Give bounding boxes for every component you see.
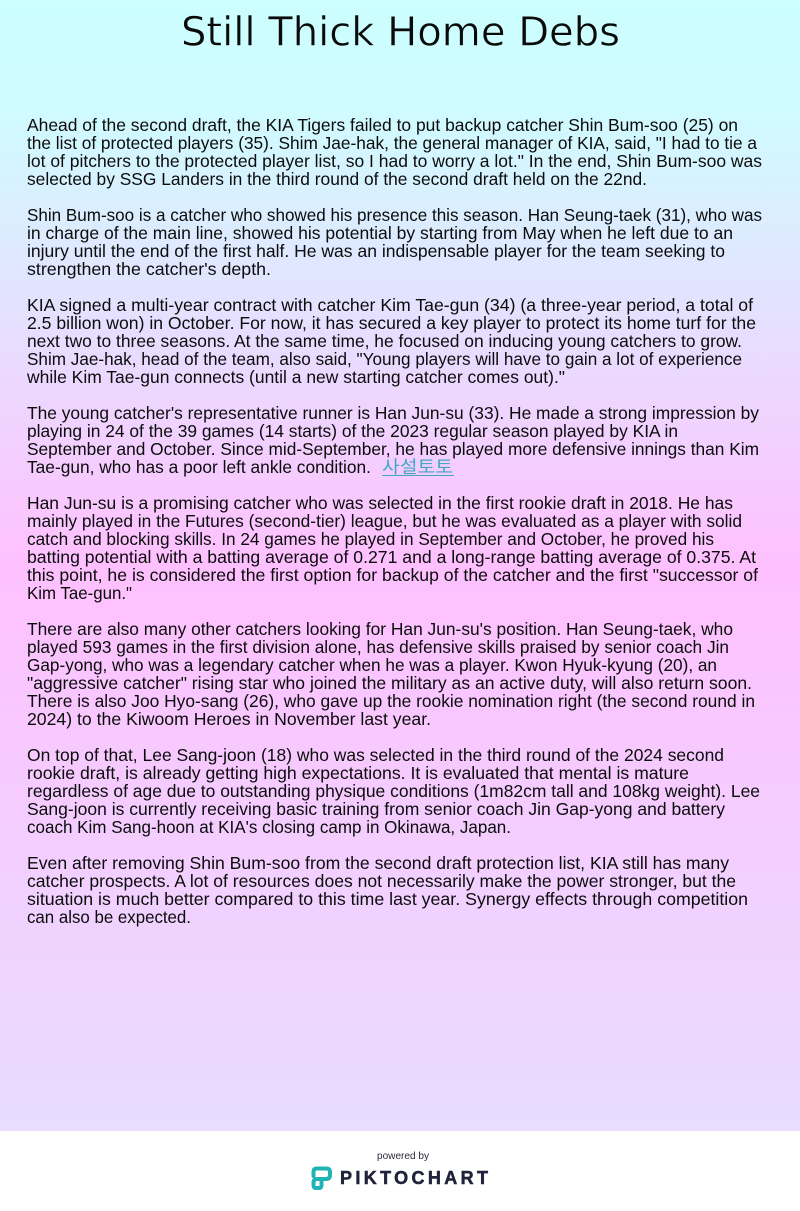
paragraph 6: "aggressive catcher" rising star who joined the military as an active duty, will also return soon. xyxy=(27,673,752,693)
paragraph 7: regardless of age due to outstanding physique conditions (1m82cm tall and 108kg weight). Lee xyxy=(27,781,760,801)
paragraph 4: Tae-gun, who has a poor left ankle condition. xyxy=(27,457,371,477)
paragraph 1: Ahead of the second draft, the KIA Tigers failed to put backup catcher Shin Bum-soo (25) on xyxy=(27,115,738,135)
paragraph 5: mainly played in the Futures (second-tier) league, but he was evaluated as a player with solid xyxy=(27,511,742,531)
paragraph 7 xyxy=(27,745,760,837)
paragraph 3: KIA signed a multi-year contract with catcher Kim Tae-gun (34) (a three-year period, a total of xyxy=(27,295,753,315)
paragraph 4: The young catcher's representative runner is Han Jun-su (33). He made a strong impression by xyxy=(27,403,759,423)
paragraph 6: 2024) to the Kiwoom Heroes in November last year. xyxy=(27,709,431,729)
paragraph 5: batting potential with a batting average of 0.271 and a long-range batting average of 0.375. At xyxy=(27,547,756,567)
paragraph 5: Han Jun-su is a promising catcher who was selected in the first rookie draft in 2018. He has xyxy=(27,493,733,513)
paragraph 2: Shin Bum-soo is a catcher who showed his presence this season. Han Seung-taek (31), who was xyxy=(27,205,762,225)
footer xyxy=(0,1131,800,1211)
paragraph 2: in charge of the main line, showed his potential by starting from May when he left due to an xyxy=(27,223,733,243)
paragraph 8: can also be expected. xyxy=(27,907,191,927)
paragraph 3 xyxy=(26,295,756,387)
paragraph 1 xyxy=(27,115,762,189)
paragraph 7: On top of that, Lee Sang-joon (18) who was selected in the third round of the 2024 second xyxy=(27,745,724,765)
link text: 사설토토 xyxy=(382,457,453,477)
paragraph 5: catch and blocking skills. In 24 games he played in September and October, he proved his xyxy=(27,529,714,549)
paragraph 8: catcher prospects. A lot of resources does not necessarily make the power stronger, but the xyxy=(27,871,736,891)
paragraph 8: situation is much better compared to this time last year. Synergy effects through competition xyxy=(27,889,748,909)
paragraph 6: There is also Joo Hyo-sang (26), who gave up the rookie nomination right (the second round in xyxy=(27,691,755,711)
paragraph 3: while Kim Tae-gun connects (until a new starting catcher comes out)." xyxy=(26,367,565,387)
paragraph 1: lot of pitchers to the protected player list, so I had to worry a lot." In the end, Shin Bum-soo was xyxy=(27,151,762,171)
paragraph 7: Sang-joon is currently receiving basic training from senior coach Jin Gap-yong and battery xyxy=(27,799,725,819)
paragraph 2: injury until the end of the first half. He was an indispensable player for the team seeking to xyxy=(27,241,725,261)
paragraph 5: this point, he is considered the first option for backup of the catcher and the first "successor of xyxy=(27,565,758,585)
paragraph 4: playing in 24 of the 39 games (14 starts) of the 2023 regular season played by KIA in xyxy=(27,421,678,441)
paragraph 7: rookie draft, is already getting high expectations. It is evaluated that mental is mature xyxy=(27,763,689,783)
paragraph 5 xyxy=(27,493,758,603)
paragraph 4 xyxy=(27,403,759,477)
paragraph 8 xyxy=(27,853,748,927)
paragraph 2 xyxy=(27,205,762,279)
paragraph 1: the list of protected players (35). Shim Jae-hak, the general manager of KIA, said, "I had to tie a xyxy=(27,133,757,153)
paragraph 6: Gap-yong, who was a legendary catcher when he was a player. Kwon Hyuk-kyung (20), an xyxy=(27,655,717,675)
icon: piktochart logo xyxy=(314,1168,330,1188)
paragraph 8: Even after removing Shin Bum-soo from the second draft protection list, KIA still has many xyxy=(27,853,729,873)
powered by label: powered by xyxy=(377,1151,429,1162)
paragraph 1: selected by SSG Landers in the third round of the second draft held on the 22nd. xyxy=(27,169,647,189)
paragraph 3: 2.5 billion won) in October. For now, it has secured a key player to protect its home turf for the xyxy=(27,313,756,333)
paragraph 4: September and October. Since mid-September, he has played more defensive innings than Kim xyxy=(27,439,759,459)
paragraph 6: played 593 games in the first division alone, has defensive skills praised by senior coach Jin xyxy=(27,637,729,657)
paragraph 2: strengthen the catcher's depth. xyxy=(27,259,271,279)
paragraph 6 xyxy=(27,619,755,729)
paragraph 7: coach Kim Sang-hoon at KIA's closing camp in Okinawa, Japan. xyxy=(27,817,511,837)
paragraph 5: Kim Tae-gun." xyxy=(27,583,132,603)
paragraph 3: Shim Jae-hak, head of the team, also said, "Young players will have to gain a lot of experience xyxy=(27,349,742,369)
paragraph 6: There are also many other catchers looking for Han Jun-su's position. Han Seung-taek, who xyxy=(27,619,733,639)
wordmark: PIKTOCHART xyxy=(340,1168,488,1188)
paragraph 3: next two to three seasons. At the same time, he focused on inducing young catchers to grow. xyxy=(27,331,742,351)
title: Still Thick Home Debs xyxy=(181,10,620,56)
